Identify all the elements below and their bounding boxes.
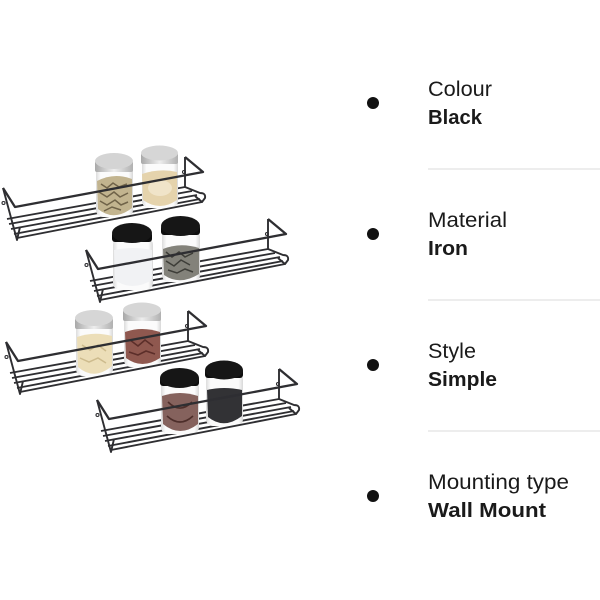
bullet: [367, 490, 379, 502]
bullet: [367, 359, 379, 371]
spec row: mounting type: [367, 470, 569, 522]
label and value: [428, 470, 569, 522]
label and value: Material: [428, 208, 507, 232]
rack 3 with silver-lid jars: [5, 302, 208, 394]
jar: oats: [95, 153, 133, 217]
product photo: four spice racks with jars: [2, 146, 299, 452]
jar: beige powder: [141, 146, 178, 208]
rack 1 with silver-lid jars: [2, 146, 205, 240]
label and value: Black: [428, 106, 483, 129]
label and value: Style: [428, 339, 476, 363]
jar: dark herbs: [161, 216, 200, 282]
jar: white powder: [112, 223, 153, 290]
rack 4 with black-lid jars: [96, 360, 299, 452]
rack 2 with black-lid jars: [85, 216, 288, 302]
spec row: colour: [367, 77, 492, 129]
bullet: [367, 97, 379, 109]
jar: cream flakes: [75, 310, 113, 376]
jar: red-brown spice: [123, 302, 161, 367]
label and value: [428, 77, 492, 129]
label and value: [428, 208, 507, 260]
jar: black pepper: [205, 360, 243, 426]
bullet: [367, 228, 379, 240]
jar: mauve spice: [160, 368, 199, 434]
spec row: material: [367, 208, 507, 260]
label and value: Colour: [428, 77, 492, 101]
label and value: Wall Mount: [428, 499, 546, 522]
label and value: Mounting type: [428, 470, 569, 494]
spec row: style: [367, 339, 497, 391]
label and value: Simple: [428, 368, 497, 391]
label and value: [428, 339, 497, 391]
label and value: Iron: [428, 237, 468, 260]
